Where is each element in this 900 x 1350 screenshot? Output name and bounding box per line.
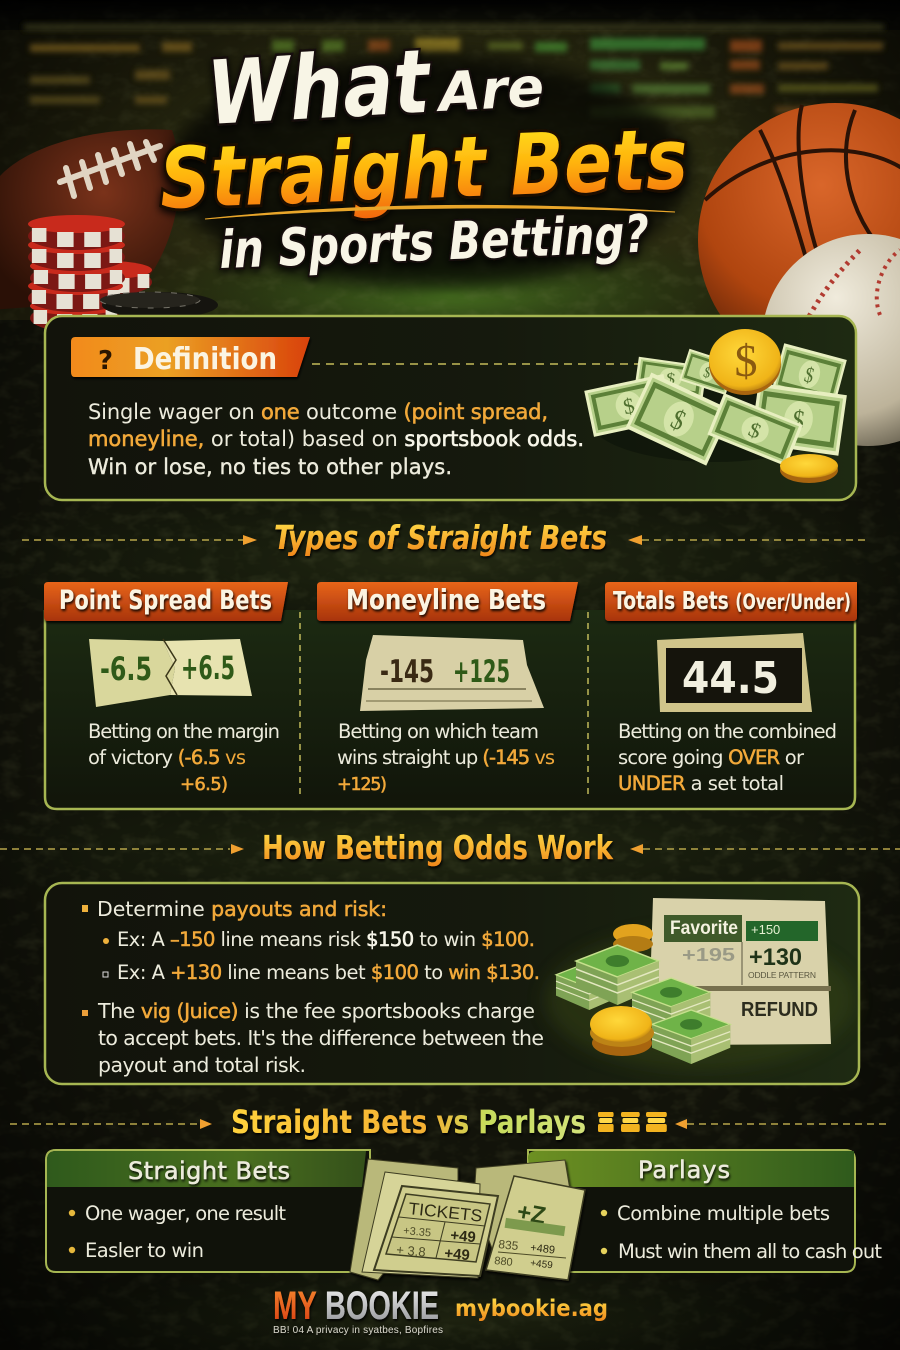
moneyline column: Betting on which team xyxy=(338,720,539,743)
panel: straight bets: Easler to win xyxy=(85,1239,204,1262)
panel: definition xyxy=(45,316,856,500)
icon: odds ticket with cash: +150 xyxy=(751,922,780,937)
icon: betting tickets: +459 xyxy=(530,1258,554,1271)
point spread column xyxy=(44,582,288,795)
point spread column: of victory (-6.5 vs xyxy=(88,746,246,769)
totals column: 44.5 xyxy=(682,653,779,704)
panel: parlays xyxy=(528,1150,882,1272)
definition heading tag: ? xyxy=(98,346,113,376)
logo: MyBookie: BOOKIE xyxy=(325,1284,439,1328)
moneyline column: -145 xyxy=(380,654,434,690)
icon: basketball xyxy=(698,103,900,377)
odds text: to accept bets. It's the difference between the xyxy=(98,1026,544,1050)
section heading: odds: How Betting Odds Work xyxy=(262,828,614,867)
icon: poker chips xyxy=(28,215,218,332)
panel: straight bets xyxy=(46,1150,370,1272)
panel: types of bets xyxy=(44,582,857,809)
panel: parlays: Parlays xyxy=(638,1156,730,1184)
totals column: Betting on the combined xyxy=(618,720,837,743)
logo: MyBookie xyxy=(273,1284,443,1336)
icon: football xyxy=(0,129,179,310)
totals column: score going OVER or xyxy=(618,746,805,769)
panel: definition: Win or lose, no ties to other plays. xyxy=(88,455,452,479)
icon: betting tickets: +49 xyxy=(444,1245,470,1264)
logo: MyBookie: MY xyxy=(273,1284,317,1328)
title: Straight Bets xyxy=(158,110,689,228)
icon: odds ticket with cash: ODDLE PATTERN xyxy=(748,970,816,980)
definition heading tag: Definition xyxy=(133,342,277,377)
icon: odds ticket with cash: +130 xyxy=(749,944,802,971)
definition heading tag xyxy=(71,337,310,377)
moneyline column: Moneyline Bets xyxy=(346,583,546,616)
icon: odds ticket with cash: Favorite xyxy=(670,918,738,939)
panel: straight bets: One wager, one result xyxy=(85,1202,286,1225)
panel: straight bets: Straight Bets xyxy=(128,1157,290,1185)
icon: betting tickets xyxy=(350,1159,585,1280)
icon: betting tickets: 835 xyxy=(498,1237,519,1253)
odds text: Determine payouts and risk: xyxy=(97,897,387,921)
section heading: vs: Straight Bets vs Parlays xyxy=(231,1103,586,1141)
panel: parlays: Combine multiple bets xyxy=(617,1202,830,1225)
icon: betting tickets: +Z xyxy=(515,1198,548,1230)
icon: cash pile and coins xyxy=(586,329,845,483)
icon: betting tickets: + 3.8 xyxy=(396,1242,426,1260)
odds text xyxy=(82,897,544,1077)
point spread column: +6.5) xyxy=(180,774,228,795)
totals column: Totals Bets (Over/Under) xyxy=(613,586,851,615)
panel: parlays: Must win them all to cash out xyxy=(618,1240,882,1263)
icon: betting tickets: TICKETS xyxy=(408,1199,483,1226)
point spread column: +6.5 xyxy=(181,649,235,687)
moneyline column: wins straight up (-145 vs xyxy=(337,746,555,769)
definition text: Single wager on one outcome (point spread, xyxy=(88,400,548,424)
title: Are xyxy=(433,56,546,124)
odds text: Ex: A –150 line means risk $150 to win $100. xyxy=(117,928,535,951)
point spread column: Point Spread Bets xyxy=(59,585,272,616)
panel: definition: moneyline, or total) based on sportsbook odds. xyxy=(88,427,584,451)
section heading: vs xyxy=(10,1103,890,1141)
panel: how odds work xyxy=(45,883,859,1084)
odds text: The vig (Juice) is the fee sportsbooks charge xyxy=(97,999,535,1023)
totals column xyxy=(605,582,857,795)
section heading: odds xyxy=(0,828,900,867)
icon: odds ticket with cash xyxy=(545,898,855,1070)
section heading: types: Types of Straight Bets xyxy=(274,518,607,557)
moneyline column: +125) xyxy=(337,775,387,795)
title: in Sports Betting? xyxy=(218,205,650,281)
moneyline column xyxy=(317,582,578,795)
odds board xyxy=(24,24,884,118)
point spread column: Betting on the margin xyxy=(88,720,280,743)
icon: baseball xyxy=(762,234,900,446)
website address: mybookie.ag xyxy=(455,1296,608,1322)
icon: betting tickets: 880 xyxy=(494,1255,513,1269)
moneyline column: +125 xyxy=(453,654,510,690)
icon: betting tickets: +489 xyxy=(530,1242,556,1257)
point spread column: -6.5 xyxy=(100,650,152,688)
icon: cash pile and coins: $ xyxy=(734,335,758,386)
title: What xyxy=(204,30,434,145)
icon: odds ticket with cash: +195 xyxy=(682,945,735,965)
icon: betting tickets: +49 xyxy=(450,1227,476,1246)
odds text: Ex: A +130 line means bet $100 to win $130. xyxy=(117,961,540,984)
icon: odds ticket with cash: REFUND xyxy=(741,999,818,1021)
totals column: UNDER a set total xyxy=(618,772,784,795)
title xyxy=(158,30,690,285)
section heading: types xyxy=(22,518,870,557)
icon: betting tickets: +3.35 xyxy=(403,1225,432,1239)
logo: MyBookie: BB! 04 A privacy in syatbes, Bopfires xyxy=(273,1325,443,1336)
odds text: payout and total risk. xyxy=(98,1053,306,1077)
icon: coin stacks xyxy=(598,1112,667,1132)
